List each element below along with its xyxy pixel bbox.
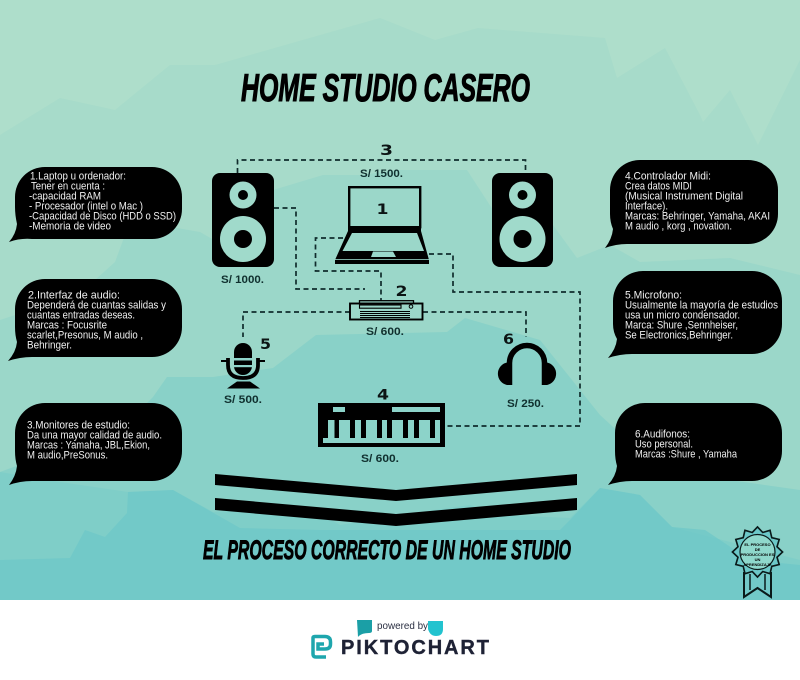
callout 5: microphone: usa un micro condensador. <box>625 310 740 322</box>
number 3: 3 <box>380 143 393 159</box>
callout 2: audio interface <box>8 279 182 361</box>
icon: midi keyboard <box>318 403 445 447</box>
number 1: 1 <box>376 202 388 218</box>
price: speaker: S/ 1000. <box>221 274 264 286</box>
icon: audio interface <box>350 301 422 320</box>
callout 5: microphone: Marca: Shure ,Sennheiser, <box>625 320 738 332</box>
number 2: 2 <box>396 284 408 300</box>
callout 2: audio interface: 2.Interfaz de audio: <box>28 290 120 302</box>
powered by flag icon <box>357 620 372 637</box>
price: headphones: S/ 250. <box>507 398 544 410</box>
dashed connection cables <box>238 160 580 426</box>
number 5: 5 <box>260 337 271 353</box>
icon: left speaker <box>212 173 274 267</box>
double chevron divider <box>215 474 577 526</box>
callout 2: audio interface: cuantas entradas deseas. <box>27 310 135 322</box>
number 4: 4 <box>377 388 389 404</box>
callout 5: microphone: 5.Microfono: <box>625 290 682 302</box>
callout 2: audio interface: Dependerá de cuantas salidas y <box>27 300 166 312</box>
badge seal <box>732 527 783 597</box>
callout 6: headphones: Uso personal. <box>635 438 693 450</box>
icon: laptop <box>335 187 429 264</box>
footer band <box>0 600 800 680</box>
callout 2: audio interface: Behringer. <box>27 340 72 352</box>
callout 1: laptop: 1.Laptop u ordenador: <box>30 170 126 182</box>
callout 2: audio interface: scarlet,Presonus, M audio , <box>27 330 143 342</box>
powered by shield icon <box>428 621 443 636</box>
icon: headphones <box>498 346 556 385</box>
callout 4: midi controller: 4.Controlador Midi: <box>625 170 711 182</box>
callout 1: laptop: -capacidad RAM <box>29 190 101 202</box>
icon: microphone <box>221 343 265 388</box>
callout 3: studio monitors <box>9 403 182 485</box>
price: interface: S/ 600. <box>366 326 404 338</box>
badge seal: PRODUCCION ES <box>741 552 775 557</box>
callout 2: audio interface: Marcas : Focusrite <box>27 320 107 332</box>
callout 5: microphone <box>608 271 782 358</box>
Piktochart logo mark <box>313 636 330 657</box>
callout 3: studio monitors: Marcas : Yamaha, JBL,Ekion, <box>27 440 150 452</box>
number 6: 6 <box>503 332 514 348</box>
callout 4: midi controller: Interface). <box>625 200 668 212</box>
callout 5: microphone: Usualmente la mayoría de estudios <box>625 300 778 312</box>
callout 5: microphone: Se Electronics,Behringer. <box>625 330 733 342</box>
callout 4: midi controller: M audio , korg , novation. <box>625 220 732 232</box>
powered by text: powered by <box>377 620 429 632</box>
callout 6: headphones: 6.Audifonos: <box>635 428 690 440</box>
callout 4: midi controller <box>605 160 778 248</box>
badge seal: EL PROCESO <box>744 542 771 547</box>
badge seal: DE <box>755 547 761 552</box>
Piktochart wordmark: PIKTOCHART <box>341 637 489 659</box>
price: monitors top: S/ 1500. <box>360 168 403 180</box>
callout 1: laptop: -Capacidad de Disco (HDD o SSD) <box>29 210 176 222</box>
callout 6: headphones <box>608 403 782 485</box>
price: microphone: S/ 500. <box>224 394 262 406</box>
callout 4: midi controller: Marcas: Behringer, Yamaha, AKAI <box>625 210 770 222</box>
callout 1: laptop: Tener en cuenta : <box>31 180 105 192</box>
callout 1: laptop: -Memoria de video <box>29 220 111 232</box>
badge seal: APRENDIZAJE <box>743 562 772 567</box>
title: HOME STUDIO CASERO <box>241 67 530 110</box>
callout 1: laptop <box>9 167 182 242</box>
callout 3: studio monitors: 3.Monitores de estudio: <box>27 420 130 432</box>
callout 4: midi controller: Crea datos MIDI <box>625 180 692 192</box>
callout 6: headphones: Marcas :Shure , Yamaha <box>635 448 738 460</box>
callout 3: studio monitors: M audio,PreSonus. <box>27 450 108 462</box>
callout 1: laptop: - Procesador (intel o Mac ) <box>29 200 143 212</box>
icon: right speaker <box>492 173 553 267</box>
callout 4: midi controller: (Musical Instrument Digital <box>625 190 743 202</box>
badge seal: UN <box>755 557 760 562</box>
price: keyboard: S/ 600. <box>361 453 399 465</box>
callout 3: studio monitors: Da una mayor calidad de audio. <box>27 430 162 442</box>
